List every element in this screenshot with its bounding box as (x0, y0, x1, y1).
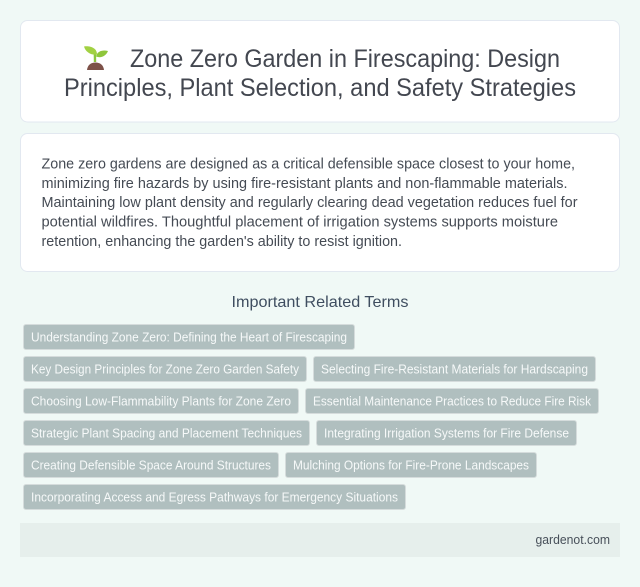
heading: related terms: Important Related Terms (232, 294, 408, 311)
tag: defensible space: Creating Defensible Space Around Structures (31, 458, 271, 472)
tag: understanding zone zero (24, 324, 354, 350)
tag: understanding zone zero: Understanding Zone Zero: Defining the Heart of Firescaping (31, 330, 347, 344)
icon: seedling (84, 46, 108, 70)
panel: title card (20, 20, 620, 122)
text block: description: minimizing fire hazards by using fire-resistant plants and non-flammable materials. (42, 175, 568, 192)
text block: description (42, 155, 578, 250)
tag: irrigation systems (316, 420, 576, 446)
heading: title: Zone Zero Garden in Firescaping: Design (130, 45, 560, 73)
heading: title (64, 45, 576, 102)
tag: maintenance practices: Essential Maintenance Practices to Reduce Fire Risk (313, 394, 591, 408)
text block: description: Zone zero gardens are designed as a critical defensible space closest to your home, (42, 155, 575, 172)
text block: description: retention, enhancing the garden's ability to resist ignition. (42, 233, 402, 250)
tag: low-flammability plants: Choosing Low-Flammability Plants for Zone Zero (31, 394, 291, 408)
tag: fire-resistant materials (314, 356, 596, 382)
tag list (24, 324, 598, 510)
tag: irrigation systems: Integrating Irrigation Systems for Fire Defense (324, 426, 569, 440)
footer: site name: gardenot.com (536, 533, 610, 547)
tag: plant spacing (24, 420, 310, 446)
tag: maintenance practices (306, 388, 598, 414)
tag: key design principles (24, 356, 306, 382)
tag: defensible space (24, 452, 278, 478)
tag: mulching options (286, 452, 536, 478)
tag: low-flammability plants (24, 388, 298, 414)
footer bar (20, 523, 620, 557)
tag: key design principles: Key Design Principles for Zone Zero Garden Safety (31, 362, 299, 376)
text block: description: potential wildfires. Thoughtful placement of irrigation systems supports moisture (42, 214, 558, 231)
tag: mulching options: Mulching Options for Fire-Prone Landscapes (293, 458, 529, 472)
panel: description card (20, 134, 620, 272)
tag: fire-resistant materials: Selecting Fire-Resistant Materials for Hardscaping (321, 362, 588, 376)
tag: plant spacing: Strategic Plant Spacing and Placement Techniques (31, 426, 302, 440)
tag: access and egress (24, 484, 406, 510)
heading: title: Principles, Plant Selection, and Safety Strategies (64, 74, 576, 102)
tag: access and egress: Incorporating Access and Egress Pathways for Emergency Situations (31, 490, 398, 504)
text block: description: Maintaining low plant density and regularly clearing dead vegetation reduces fuel for (42, 194, 578, 211)
